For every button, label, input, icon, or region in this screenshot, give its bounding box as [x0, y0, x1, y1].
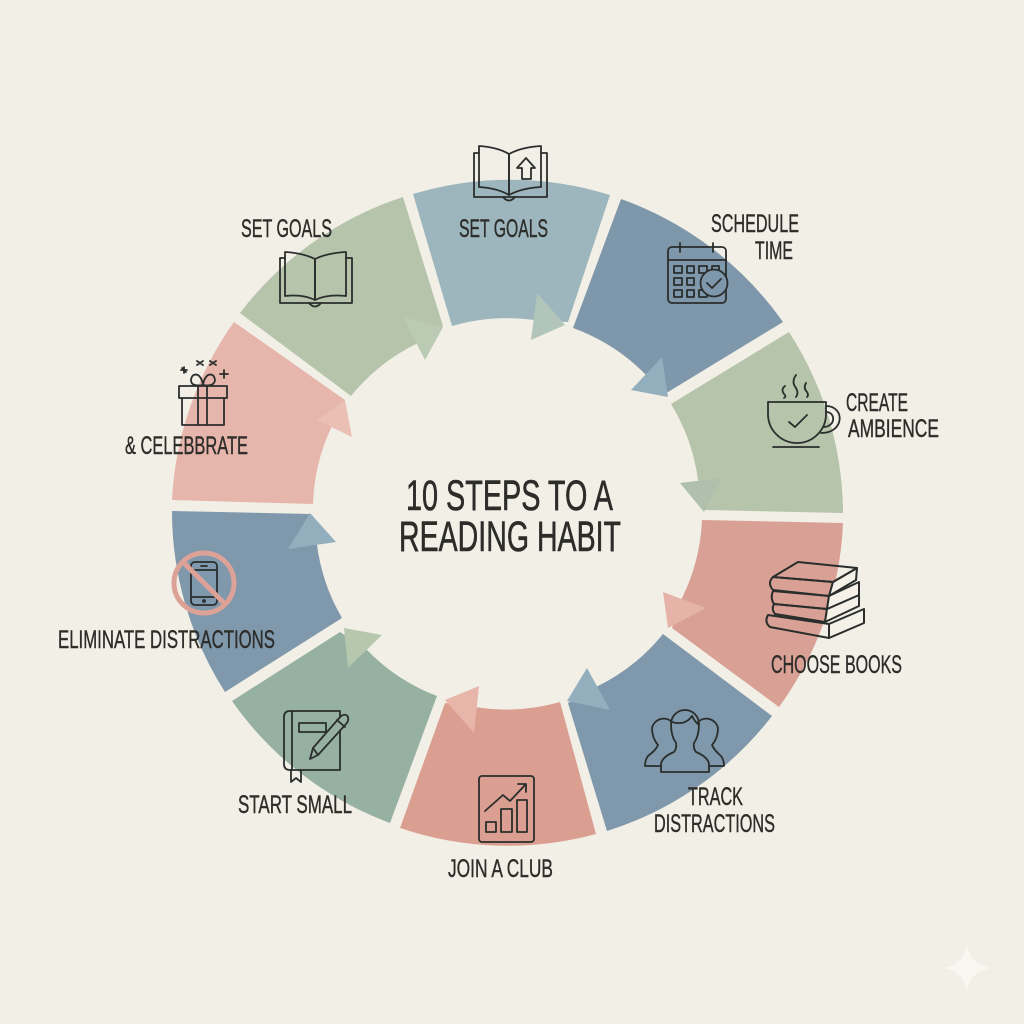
panel: step choose books [663, 520, 902, 707]
icon: notebook and pen [284, 711, 348, 782]
label [711, 210, 799, 265]
label: CHOOSE BOOKS [771, 651, 902, 679]
arrow [317, 400, 352, 437]
panel: step schedule time [573, 199, 799, 397]
segment shape [172, 322, 345, 504]
arrow [403, 317, 443, 360]
panel: step celebrate [125, 322, 352, 504]
label: SCHEDULE [711, 210, 799, 238]
segment shape [568, 634, 772, 831]
icon: gift box [179, 361, 228, 425]
title [399, 472, 621, 561]
arrow [531, 293, 565, 340]
icon: coffee cup [768, 375, 840, 447]
arrow [344, 628, 382, 668]
icon: corner sparkle [944, 945, 990, 991]
segment shape [672, 520, 843, 707]
panel: step create ambience [671, 332, 939, 513]
arrow [445, 686, 479, 733]
segment shape [413, 180, 610, 326]
panel: step join a club [400, 686, 596, 883]
arrow [567, 668, 610, 710]
arrow [631, 357, 668, 397]
label: TRACK [688, 783, 743, 811]
panel: step set goals left [240, 197, 443, 396]
icon: open book [280, 252, 352, 306]
label: START SMALL [238, 791, 352, 819]
panel: step set goals top [413, 146, 610, 340]
label: DISTRACTIONS [654, 810, 775, 838]
segment shape [232, 632, 437, 823]
icon: calendar with check [668, 243, 728, 303]
segment shape [671, 332, 843, 513]
arrow [288, 513, 336, 549]
label: JOIN A CLUB [448, 855, 553, 883]
label: AMBIENCE [848, 415, 939, 443]
segment shape [573, 199, 783, 392]
title: READING HABIT [399, 513, 621, 561]
panel: step start small [232, 628, 437, 823]
icon: stack of books [766, 562, 864, 638]
segment shape [240, 197, 443, 396]
label [654, 783, 775, 838]
panel: step eliminate distractions [58, 511, 342, 692]
label: ELIMINATE DISTRACTIONS [58, 626, 275, 654]
arrow [663, 592, 706, 628]
label: SET GOALS [459, 215, 548, 243]
label: SET GOALS [241, 215, 332, 243]
icon: open book with arrow [474, 146, 547, 200]
title: 10 STEPS TO A [406, 472, 613, 520]
label: & CELEBBRATE [125, 432, 248, 460]
label: TIME [755, 237, 793, 265]
label [846, 389, 939, 443]
segment shape [172, 511, 342, 692]
icon: no phone [174, 553, 234, 613]
arrow [680, 478, 722, 512]
label: CREATE [846, 389, 908, 417]
segment shape [400, 702, 596, 846]
icon: group of people [645, 710, 724, 772]
panel: step track distractions [567, 634, 775, 838]
icon: growth chart [479, 776, 534, 842]
